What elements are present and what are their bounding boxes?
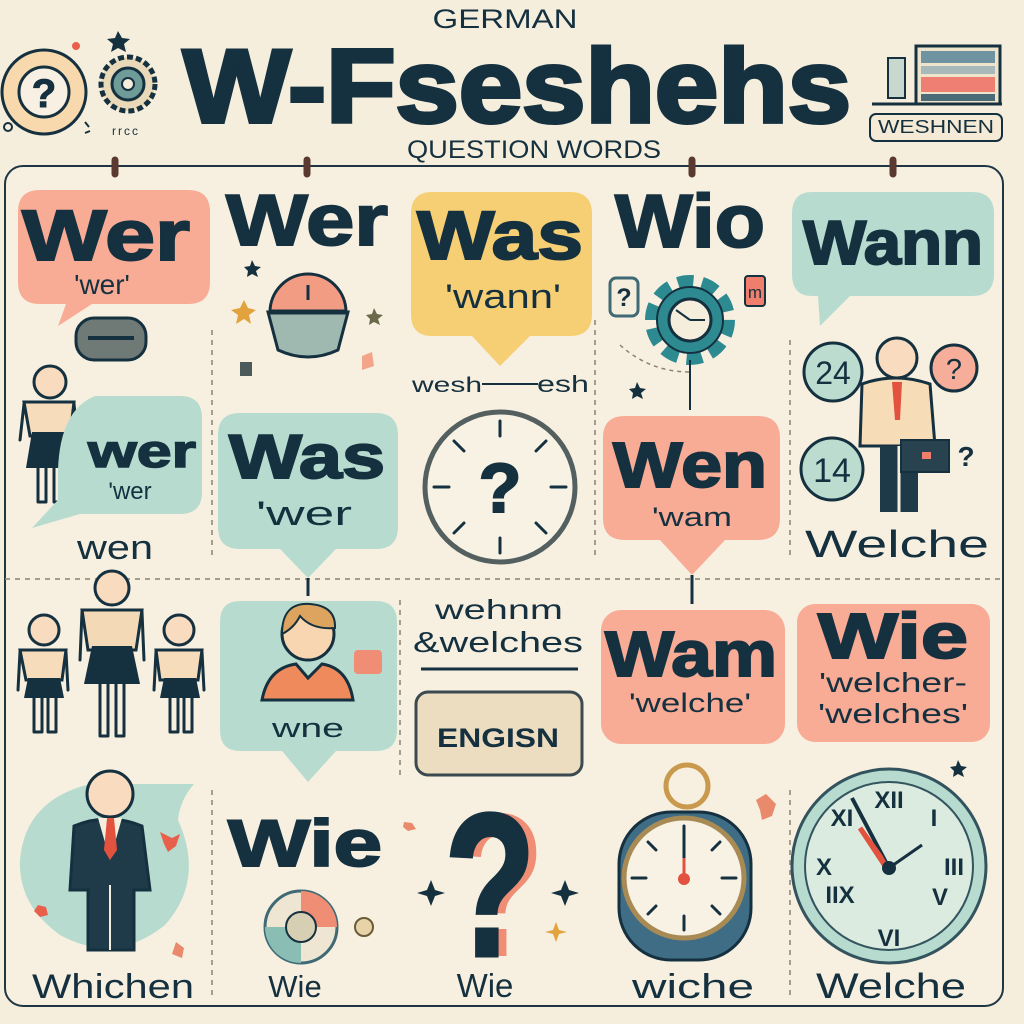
panel: wer teal bubble: 'wer (108, 478, 152, 505)
text: wesh connector (411, 371, 589, 397)
panel: Wie coral box: 'welcher- (819, 667, 967, 698)
text: Wie center: Wie (457, 967, 513, 1004)
panel: Was yellow bubble: 'wann' (445, 278, 561, 316)
heading: Wer: Wer (226, 181, 388, 261)
panel: wne portrait bubble: wne (271, 713, 344, 743)
icon: large question mark: ? (453, 771, 545, 1000)
icon: large question mark: ? (444, 771, 536, 1000)
panel: Was yellow bubble: Was (417, 197, 583, 274)
text: Whichen: Whichen (32, 968, 194, 1006)
panel: Was teal bubble (218, 413, 398, 596)
panel: Was yellow bubble (411, 192, 592, 366)
panel: Wie coral box (797, 600, 990, 742)
icon: question mark badge (2, 31, 130, 134)
panel: wer teal bubble: wer (87, 425, 196, 477)
icon: wall clock with roman numerals (792, 760, 986, 963)
text: Welche: Welche (805, 524, 989, 566)
text: wehnm and welches: &welches (413, 627, 583, 659)
icon: gear spiral (85, 57, 155, 138)
icon: question clock: ? (479, 449, 521, 527)
title: GERMAN (432, 4, 578, 34)
text: Wie small: Wie (268, 969, 322, 1004)
icon: wall clock with roman numerals: V (932, 884, 948, 911)
text: Welche bottom: Welche (816, 967, 966, 1006)
text: wehnm and welches (413, 594, 583, 669)
text: wen: wen (76, 529, 153, 567)
heading: Wie: Wie (228, 806, 382, 880)
icon: wall clock with roman numerals: XII (874, 787, 904, 814)
icon: man with numbers: ? (957, 441, 975, 472)
text: wesh connector: esh (537, 371, 589, 397)
panel: Wam coral box: 'welche' (629, 688, 751, 718)
icon: man with numbers: 24 (815, 355, 851, 391)
panel: Wer coral bubble: Wer (22, 197, 190, 276)
icon: wall clock with roman numerals: XI (831, 805, 853, 832)
icon: teal gear: m (748, 283, 762, 302)
icon: three figures (18, 571, 204, 736)
icon: teal gear: ? (616, 284, 632, 312)
icon: man with numbers: ? (946, 354, 962, 386)
panel: Wie coral box: Wie (818, 600, 968, 672)
panel: Was teal bubble: 'wer (256, 495, 352, 533)
text: wiche: wiche (631, 968, 754, 1006)
icon: book and label (870, 46, 1002, 141)
panel: wne portrait bubble (220, 601, 397, 782)
icon: rounded device (76, 318, 146, 360)
text: wesh connector: wesh (411, 374, 482, 397)
title (183, 4, 851, 164)
panel: Wann teal bubble: Wann (803, 209, 983, 278)
icon: alarm clock (619, 765, 776, 960)
panel: wer teal bubble (32, 396, 202, 528)
icon: wall clock with roman numerals: VI (878, 925, 900, 952)
icon: man with numbers (801, 338, 977, 512)
heading: Wo: Wio (615, 179, 765, 263)
text: wehnm and welches: wehnm (434, 594, 563, 625)
icon: question clock (425, 412, 575, 562)
title: QUESTION WORDS (407, 136, 661, 164)
panel: Wen coral bubble (603, 416, 780, 604)
icon: wall clock with roman numerals: I (931, 805, 937, 832)
icon: gear spiral: rrcc (112, 124, 138, 138)
icon: wall clock with roman numerals: III (944, 854, 964, 881)
panel: Wie coral box: 'welches' (818, 698, 968, 729)
icon: dome with stars (231, 260, 383, 376)
icon: wall clock with roman numerals: IIX (825, 882, 855, 909)
panel: Wam coral box (601, 610, 785, 744)
panel: Wer coral bubble: 'wer' (74, 269, 130, 300)
icon: man with numbers: 14 (813, 452, 851, 490)
icon: question mark badge: ? (32, 72, 56, 116)
button: English: ENGISN (437, 723, 559, 753)
panel: man in suit with bubble (20, 771, 194, 958)
icon: wall clock with roman numerals: X (816, 854, 832, 881)
panel: Wann teal bubble (792, 192, 994, 326)
panel: Wen coral bubble: 'wam (652, 502, 732, 532)
panel: Wen coral bubble: Wen (613, 429, 767, 501)
title: W-Fseshehs (183, 29, 851, 145)
button: English (416, 692, 582, 775)
icon: woman figure (20, 366, 78, 502)
panel: Was teal bubble: Was (229, 423, 385, 492)
icon: ring dial (265, 891, 373, 963)
panel: Wam coral box: Wam (605, 618, 777, 690)
icon: book and label: WESHNEN (878, 117, 994, 137)
panel: Wer coral bubble (18, 190, 210, 326)
icon: teal gear (610, 276, 765, 410)
